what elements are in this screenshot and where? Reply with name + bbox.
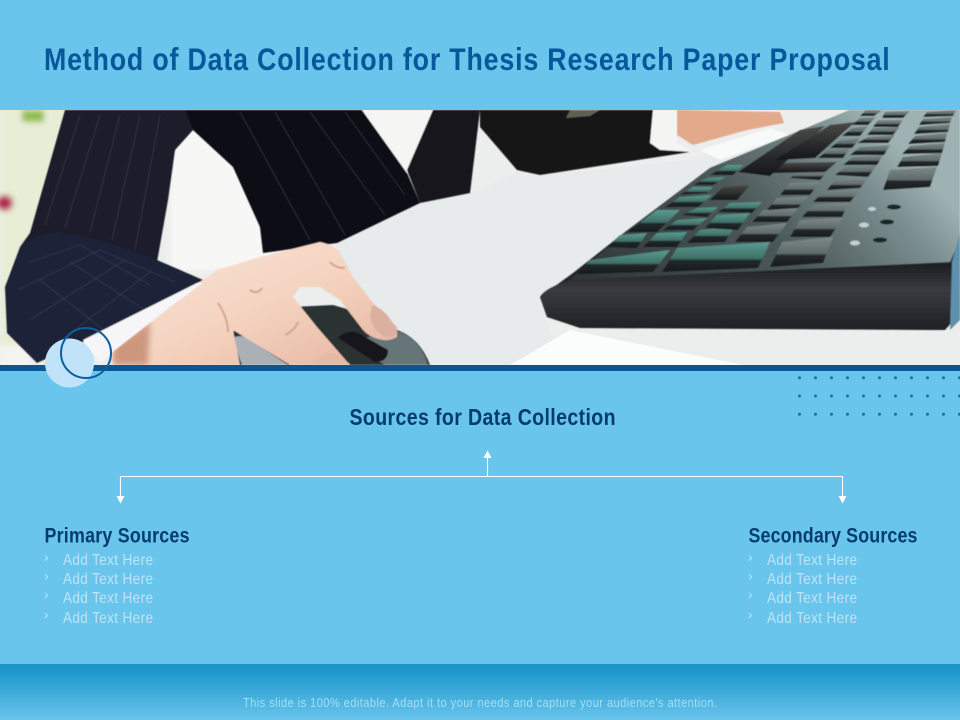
suit and hands <box>5 110 790 365</box>
secondary sources bullet list <box>749 552 857 627</box>
primary sources bullet list: Add Text Here <box>63 571 153 588</box>
main key block <box>607 233 647 248</box>
secondary sources bullet list: Add Text Here <box>767 571 857 588</box>
hand creases <box>218 262 345 335</box>
function keys <box>883 167 937 190</box>
heading: sources for data collection: Sources for Data Collection <box>350 405 616 430</box>
panel: primary sources <box>44 524 190 627</box>
arrowhead: center <box>484 450 492 458</box>
plaid cuff <box>5 232 203 363</box>
decorative pale circle <box>45 338 94 388</box>
right hand <box>677 110 784 145</box>
secondary sources bullet list: Add Text Here <box>767 610 857 627</box>
primary sources bullet list <box>45 552 153 627</box>
secondary sources bullet list: Add Text Here <box>767 590 857 607</box>
blurred room background <box>0 110 276 346</box>
keyboard top plate <box>570 110 960 280</box>
torso <box>185 110 420 253</box>
keyboard front edge <box>540 279 951 331</box>
bottom row keys <box>577 250 670 274</box>
left hand <box>113 242 397 365</box>
secondary sources bullet list: Add Text Here <box>767 552 857 569</box>
keyboard base <box>540 110 960 330</box>
footer note: This slide is 100% editable. Adapt it to your needs and capture your audience's attention. <box>243 695 717 710</box>
wrist shadow <box>113 322 150 365</box>
paper on desk <box>510 330 743 365</box>
indicator lights <box>887 204 901 210</box>
white shirt cuff <box>83 283 203 362</box>
shirt <box>362 110 433 173</box>
primary sources heading: Primary Sources <box>44 524 190 548</box>
blue divider bar <box>0 365 960 371</box>
arrowhead: right <box>838 496 846 504</box>
right shirt cuff <box>650 110 693 152</box>
tree connector arrows <box>116 450 846 504</box>
primary sources bullet list: Add Text Here <box>63 590 153 607</box>
pinstripes <box>18 112 405 345</box>
secondary sources heading: Secondary Sources <box>748 524 918 548</box>
left suit sleeve <box>20 110 193 262</box>
decorative ring <box>61 328 111 378</box>
primary sources bullet list: Add Text Here <box>63 610 153 627</box>
mouse <box>228 305 430 365</box>
keyboard <box>540 110 960 330</box>
right suit arm <box>480 110 690 175</box>
primary sources bullet list: Add Text Here <box>63 552 153 569</box>
lapel <box>407 110 480 203</box>
arrowhead: left <box>116 496 124 504</box>
desk <box>337 130 800 365</box>
panel: secondary sources <box>748 524 918 627</box>
title: Method of Data Collection for Thesis Research Paper Proposal <box>44 43 890 78</box>
photo: hands on mouse and keyboard <box>0 105 960 370</box>
fingernails <box>370 305 397 338</box>
footer band <box>0 664 960 720</box>
dot grid <box>792 370 960 424</box>
